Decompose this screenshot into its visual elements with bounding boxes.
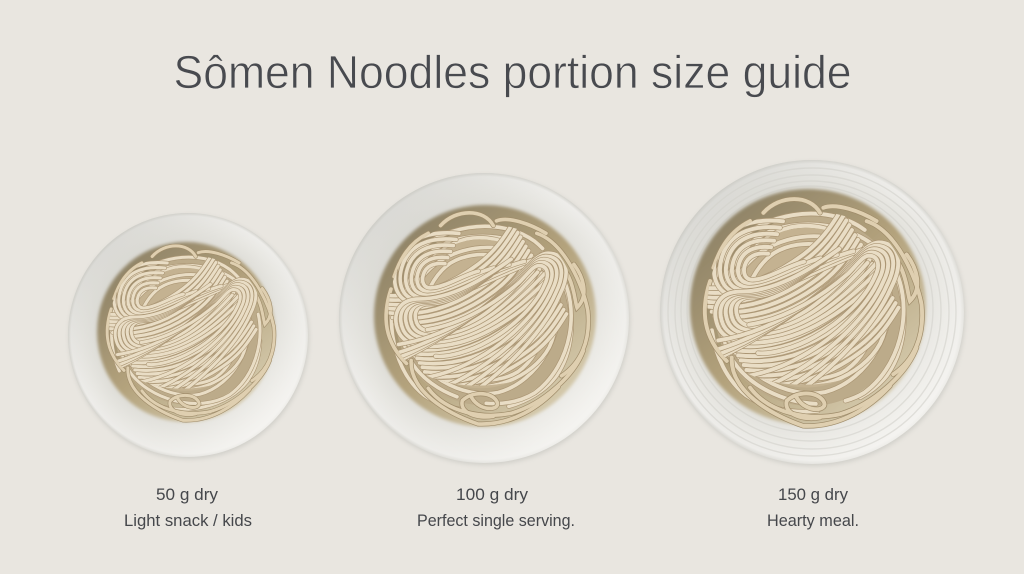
label: 50 g: 50 g dry	[156, 486, 219, 504]
icon: medium noodle nest	[313, 187, 614, 453]
panel: 100 g medium bowl	[313, 173, 630, 465]
label: 100 g: 100 g dry	[456, 486, 529, 504]
icon: small bowl broth	[97, 242, 275, 422]
panel: 150 g large bowl	[626, 160, 965, 466]
label: 50 g	[124, 486, 252, 530]
label: 100 g	[417, 486, 575, 530]
icon: large bowl ridges	[668, 168, 956, 456]
icon: large bowl broth	[690, 189, 926, 425]
icon: large noodle nest	[626, 171, 949, 457]
icon: large bowl rim	[660, 160, 964, 464]
icon: medium bowl broth	[374, 205, 596, 427]
icon: small noodle nest	[46, 225, 295, 444]
title: Sômen Noodles portion size guide	[174, 46, 852, 98]
label: 150 g: Hearty meal.	[767, 512, 859, 530]
icon: small bowl rim	[68, 213, 308, 457]
label: 50 g: Light snack / kids	[124, 512, 252, 530]
label: 150 g	[767, 486, 859, 530]
panel: 50 g small bowl	[46, 213, 309, 459]
label: 100 g: Perfect single serving.	[417, 512, 575, 530]
label: 150 g: 150 g dry	[778, 486, 849, 504]
icon: medium bowl rim	[339, 173, 629, 463]
